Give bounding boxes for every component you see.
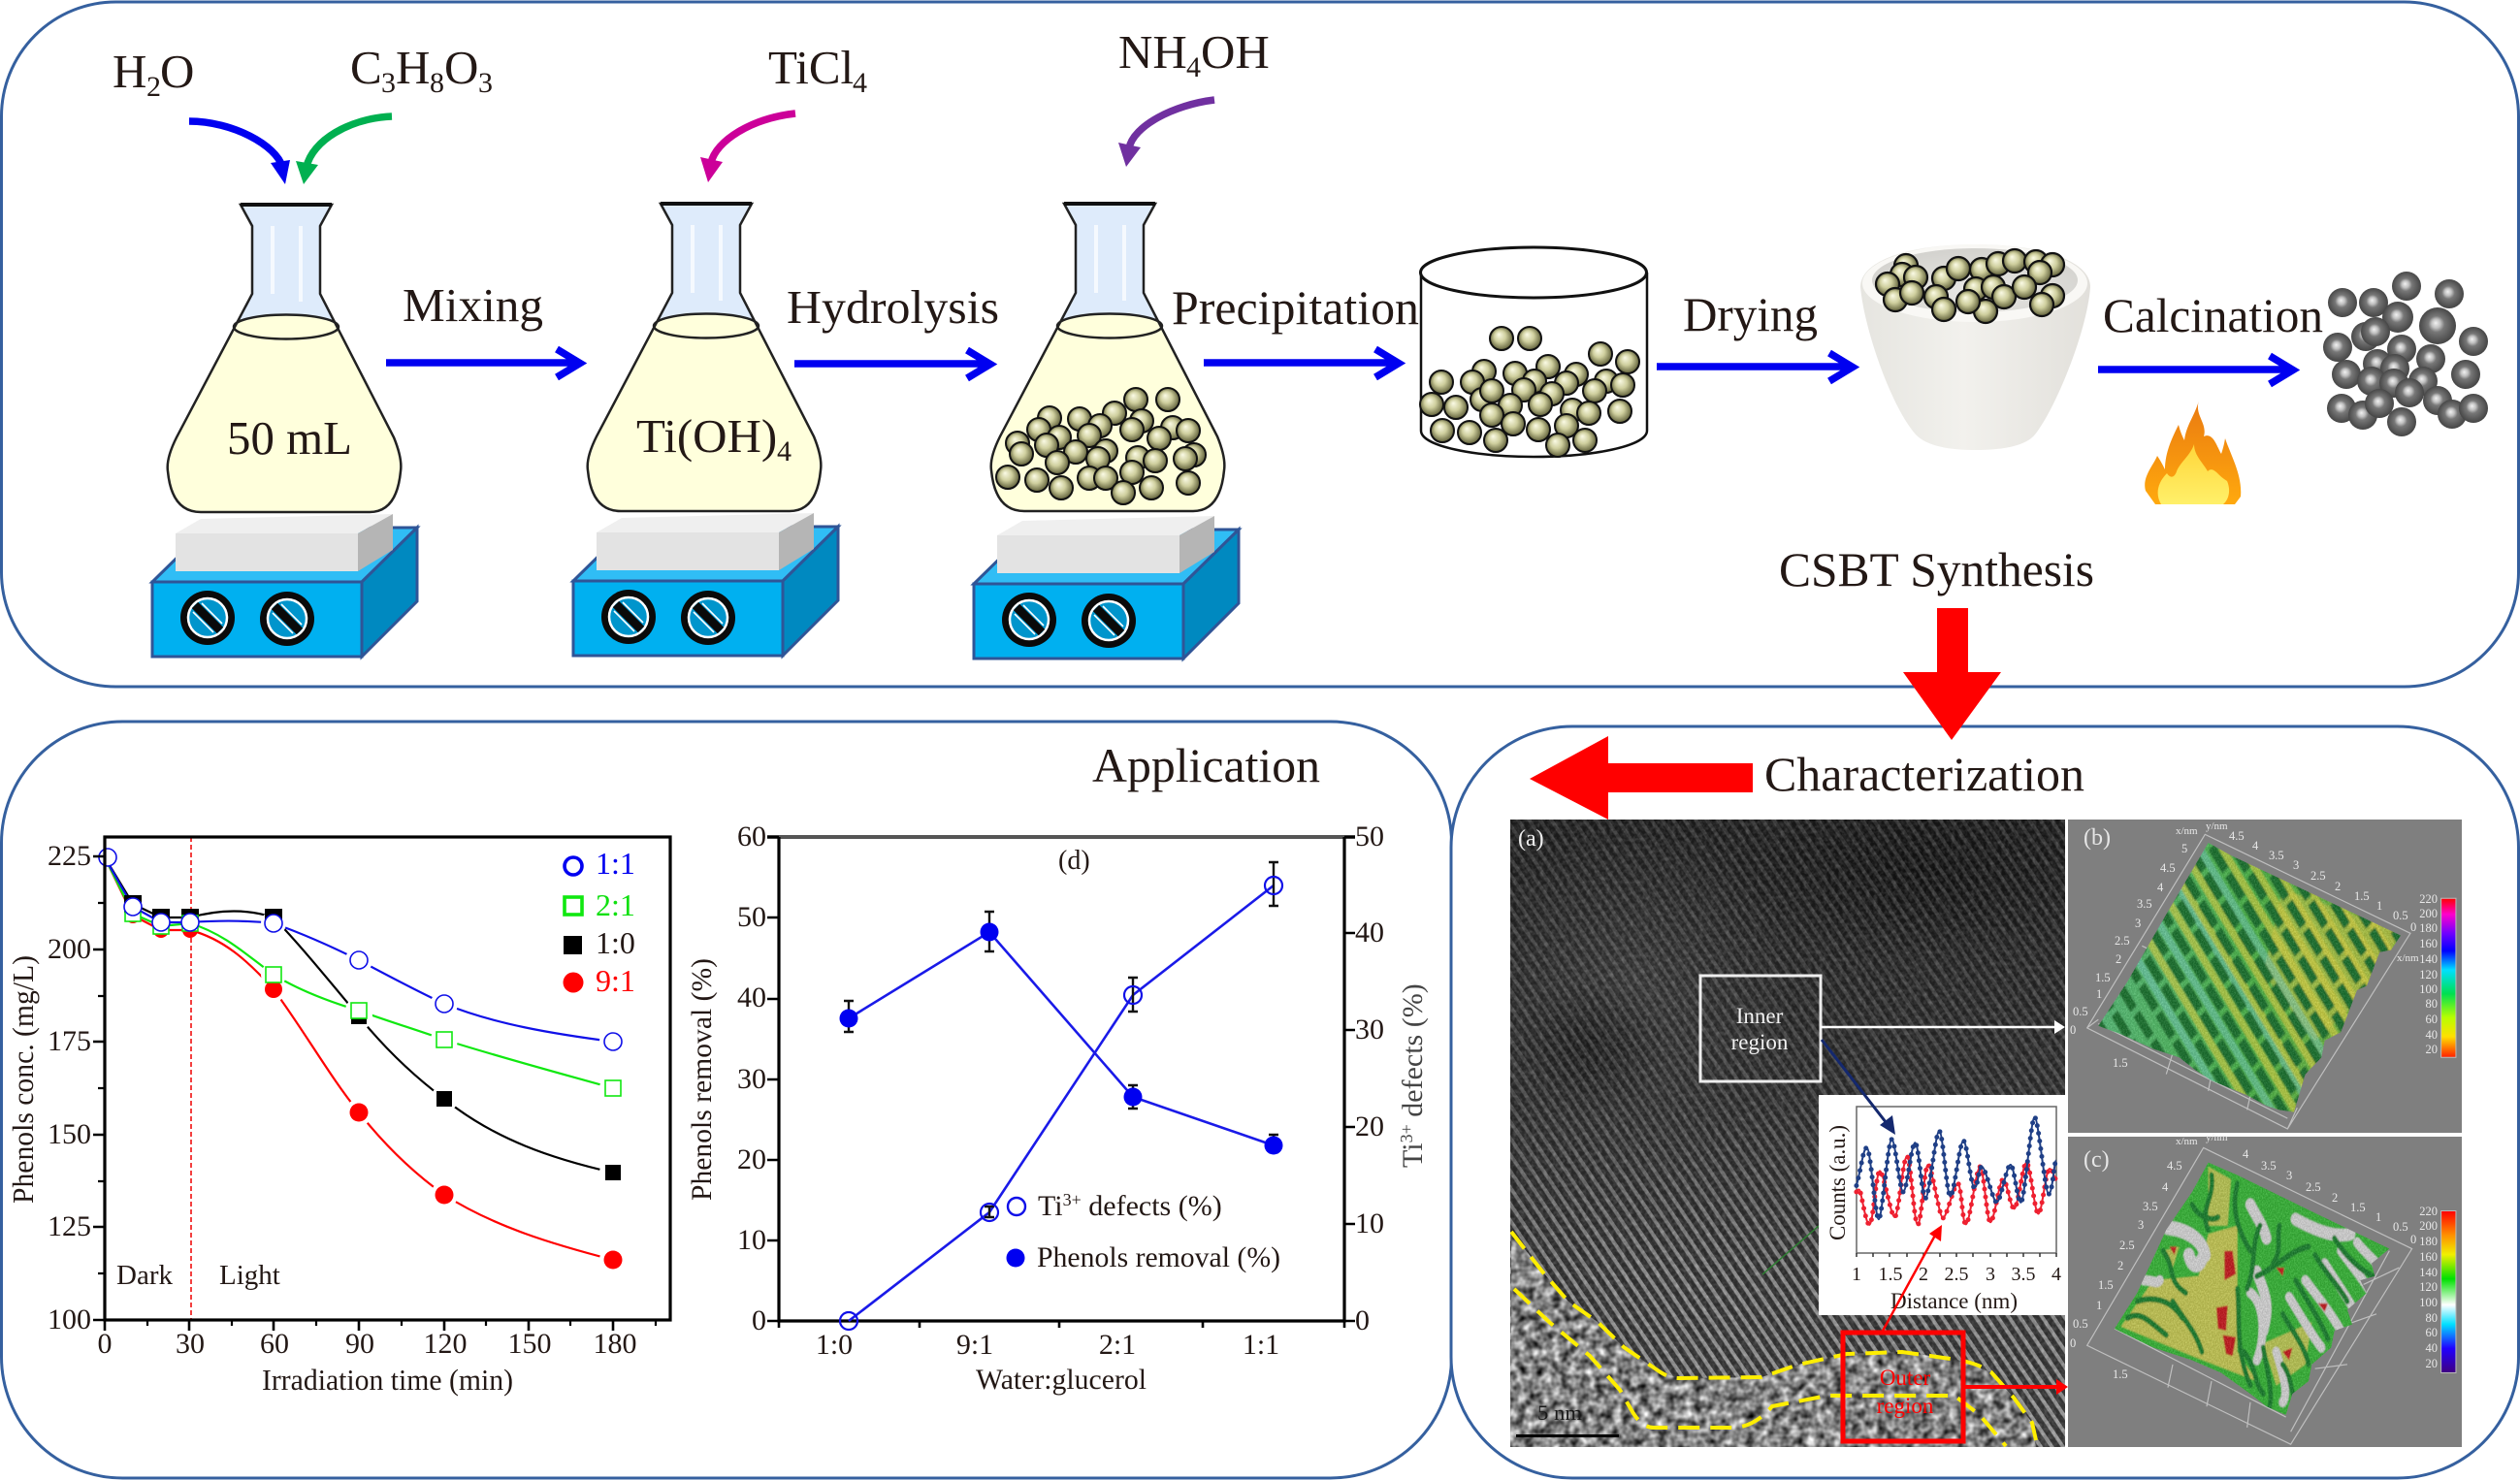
legend: Ti bbox=[1038, 1190, 1063, 1222]
color bar numbers: 60 bbox=[2425, 1326, 2438, 1339]
right axis numbers: 40 bbox=[1355, 917, 1384, 949]
step label: Drying: Drying bbox=[1683, 287, 1818, 341]
hot plate 3 bbox=[974, 516, 1239, 659]
right axis numbers: 0 bbox=[1355, 1304, 1370, 1336]
arrow: glycerol into flask bbox=[296, 116, 392, 184]
axis labels: 2.5 bbox=[2119, 1239, 2135, 1252]
x-axis numbers: 0 bbox=[97, 1328, 113, 1360]
chart: phenols removal and Ti3+ defects vs water:glycerol bbox=[686, 820, 1429, 1396]
series lines bbox=[105, 857, 613, 1260]
flask 1 bbox=[168, 205, 401, 512]
axis labels: 2.5 bbox=[2115, 934, 2130, 948]
right axis numbers bbox=[1355, 820, 1384, 1336]
y-axis title: Phenols conc. (mg/L) bbox=[7, 955, 40, 1204]
outer region box: region bbox=[1877, 1394, 1934, 1418]
step label: Hydrolysis: Hydrolysis bbox=[787, 280, 999, 334]
step label: Mixing: Mixing bbox=[403, 278, 543, 332]
flask 3 with precipitate bbox=[991, 204, 1224, 511]
series 1:1 markers bbox=[99, 849, 622, 1050]
axis labels: 1.5 bbox=[2098, 1278, 2114, 1292]
axis labels bbox=[2070, 1132, 2416, 1381]
color bar bbox=[2441, 898, 2456, 1057]
axis labels: 3.5 bbox=[2137, 897, 2152, 911]
axis labels: 0 bbox=[2410, 1233, 2416, 1246]
axis labels: x/nm bbox=[2176, 825, 2198, 837]
x-axis numbers: 150 bbox=[508, 1328, 551, 1360]
color bar numbers: 120 bbox=[2419, 1280, 2438, 1294]
axis labels: 1.5 bbox=[2113, 1056, 2128, 1070]
flask 2 label: Ti(OH) bbox=[636, 409, 777, 463]
plot frame and ticks bbox=[93, 837, 670, 1331]
wire box bbox=[2087, 1147, 2412, 1444]
label: C3H8O3: H bbox=[396, 41, 430, 94]
x-axis numbers: 180 bbox=[594, 1328, 636, 1360]
beaker with precipitate bbox=[1420, 247, 1647, 457]
axis labels: 0 bbox=[2070, 1336, 2076, 1350]
color bar numbers: 60 bbox=[2425, 1013, 2438, 1026]
legend: 9:1 bbox=[596, 963, 635, 998]
step label: Precipitation: Precipitation bbox=[1172, 280, 1419, 335]
axis labels: 1 bbox=[2096, 987, 2102, 1001]
color bar numbers: 220 bbox=[2419, 1205, 2438, 1218]
axis labels: 3.5 bbox=[2143, 1200, 2158, 1213]
legend: 2:1 bbox=[596, 887, 635, 922]
left axis numbers: 10 bbox=[737, 1224, 766, 1256]
x-axis title: Water:glucerol bbox=[976, 1364, 1147, 1396]
scale bar: 5 nm bbox=[1537, 1400, 1582, 1425]
color bar numbers: 200 bbox=[2419, 907, 2438, 920]
yellow center bbox=[2121, 1226, 2257, 1381]
panel: Characterization bbox=[1451, 726, 2518, 1478]
color bar numbers: 80 bbox=[2425, 997, 2438, 1011]
color bar bbox=[2441, 1211, 2456, 1372]
left axis numbers: 50 bbox=[737, 901, 766, 933]
axis labels: 4 bbox=[2157, 881, 2164, 894]
inset axis numbers bbox=[1852, 1264, 2061, 1285]
red hot spots bbox=[2170, 1246, 2328, 1360]
series: phenols removal bbox=[840, 912, 1282, 1154]
color bar numbers: 80 bbox=[2425, 1311, 2438, 1325]
axis labels: 0.5 bbox=[2393, 1220, 2408, 1234]
white ridges bbox=[2144, 1205, 2376, 1402]
label: C3H8O3: C bbox=[350, 41, 382, 94]
axis labels: 2.5 bbox=[2310, 869, 2326, 883]
arrow: characterization to application bbox=[1530, 736, 1753, 820]
region label: Dark: Dark bbox=[116, 1260, 173, 1291]
y-axis numbers: 225 bbox=[48, 840, 91, 872]
y-axis numbers: 200 bbox=[48, 933, 91, 965]
axis labels: 4.5 bbox=[2160, 861, 2176, 875]
axis labels: 3 bbox=[2293, 858, 2299, 872]
color bar numbers: 100 bbox=[2419, 982, 2438, 996]
category labels: 9:1 bbox=[956, 1329, 993, 1361]
inner region box bbox=[1700, 976, 1821, 1081]
axis labels: 5 bbox=[2181, 842, 2187, 855]
heading: CSBT Synthesis: CSBT Synthesis bbox=[1779, 542, 2094, 596]
scale bar bbox=[1516, 1400, 1619, 1435]
faint measurement line bbox=[1762, 1226, 1819, 1274]
step label: Calcination: Calcination bbox=[2103, 288, 2323, 342]
left axis numbers bbox=[737, 820, 766, 1336]
axis labels: 2 bbox=[2332, 1191, 2338, 1205]
calcined dark particles bbox=[2323, 272, 2488, 436]
arrow: inner region to 3D map bbox=[1821, 1020, 2065, 1034]
icon: flame bbox=[2145, 401, 2241, 504]
color bar numbers: 180 bbox=[2419, 1235, 2438, 1248]
label: NH4OH: OH bbox=[1201, 25, 1270, 79]
label: TiCl4: 4 bbox=[853, 67, 867, 99]
axis labels: 1 bbox=[2096, 1299, 2102, 1312]
inset axis numbers: 3.5 bbox=[2012, 1264, 2035, 1285]
arrow: synthesis to characterization bbox=[1903, 608, 2001, 740]
legend: defects (%) bbox=[1082, 1190, 1222, 1222]
amorphous shell region bbox=[1510, 1222, 2039, 1447]
heading: Characterization: Characterization bbox=[1764, 747, 2084, 801]
axis labels: 1 bbox=[2375, 1210, 2381, 1224]
label: NH4OH: NH bbox=[1118, 25, 1187, 79]
color bar numbers: 40 bbox=[2425, 1028, 2438, 1042]
axis labels: 0.5 bbox=[2393, 909, 2408, 922]
right axis numbers: 50 bbox=[1355, 820, 1384, 853]
axis labels: 2 bbox=[2335, 880, 2341, 893]
color bar numbers bbox=[2419, 1205, 2438, 1370]
x-axis numbers: 30 bbox=[176, 1328, 205, 1360]
3D surface map (c) bbox=[2068, 1132, 2462, 1447]
label: NH4OH: 4 bbox=[1186, 51, 1201, 83]
3D surface map (b) bbox=[1991, 820, 2511, 1133]
axis labels: 3.5 bbox=[2269, 849, 2284, 862]
axis labels: 0 bbox=[2410, 920, 2416, 934]
inset axis numbers: 2.5 bbox=[1944, 1264, 1969, 1285]
right axis numbers: 20 bbox=[1355, 1110, 1384, 1142]
panel letter: (a) bbox=[1518, 826, 1544, 852]
axis labels: 2 bbox=[2117, 1259, 2123, 1272]
HRTEM image (a) bbox=[1510, 820, 2065, 1447]
series: Ti3+ defects bbox=[840, 862, 1282, 1330]
color bar numbers: 20 bbox=[2425, 1357, 2438, 1370]
y-axis numbers: 100 bbox=[48, 1303, 91, 1335]
legend bbox=[1007, 1190, 1280, 1273]
axis labels: 3 bbox=[2286, 1169, 2292, 1182]
axis labels: 3 bbox=[2135, 917, 2141, 930]
inset axis numbers: 2 bbox=[1919, 1264, 1928, 1285]
inner region box: region bbox=[1731, 1030, 1789, 1054]
inner region box: Inner bbox=[1736, 1004, 1784, 1028]
hot plate 2 bbox=[573, 513, 838, 656]
label: H2O: 2 bbox=[146, 71, 161, 103]
color bar numbers: 140 bbox=[2419, 952, 2438, 966]
series 9:1 markers bbox=[125, 908, 623, 1269]
axis labels: 3.5 bbox=[2261, 1159, 2277, 1173]
outer region box: Outer bbox=[1880, 1366, 1931, 1390]
arrow: outer region to red curve bbox=[1882, 1225, 1942, 1333]
label: H2O: H bbox=[113, 45, 146, 98]
arrow: NH4OH into flask bbox=[1118, 100, 1214, 167]
axis labels: 4.5 bbox=[2229, 829, 2245, 843]
legend: 1:0 bbox=[596, 925, 635, 960]
axis labels: x/nm bbox=[2176, 1136, 2198, 1147]
right axis title: defects (%) bbox=[1397, 983, 1429, 1124]
arrow: water into flask bbox=[189, 121, 290, 184]
flask 2 label: 4 bbox=[777, 435, 792, 467]
panel: CSBT synthesis bbox=[2, 2, 2518, 687]
arrow: TiCl4 into flask bbox=[700, 113, 795, 182]
label: C3H8O3: O bbox=[444, 41, 478, 94]
axis labels: 2 bbox=[2116, 952, 2121, 966]
arrow: inner region to blue curve bbox=[1822, 1040, 1895, 1135]
left axis numbers: 40 bbox=[737, 981, 766, 1013]
inset: intensity line profile bbox=[1819, 1095, 2065, 1315]
left axis numbers: 20 bbox=[737, 1143, 766, 1175]
y-axis numbers: 125 bbox=[48, 1210, 91, 1242]
color bar numbers bbox=[2419, 892, 2438, 1056]
series 2:1 markers bbox=[125, 906, 621, 1096]
y-axis numbers: 150 bbox=[48, 1118, 91, 1150]
axis labels: 1.5 bbox=[2350, 1201, 2366, 1214]
inset axis numbers: 1 bbox=[1852, 1264, 1861, 1285]
left axis numbers: 30 bbox=[737, 1063, 766, 1095]
color bar numbers: 180 bbox=[2419, 921, 2438, 935]
arrow: outer region to 3D map bbox=[1963, 1379, 2068, 1395]
region label: Light: Light bbox=[219, 1260, 280, 1291]
hot plate 1 bbox=[152, 514, 417, 657]
left axis numbers: 60 bbox=[737, 820, 766, 853]
axis labels: 2.5 bbox=[2306, 1180, 2321, 1194]
right axis title: 3+ bbox=[1397, 1124, 1416, 1142]
wire box bbox=[2087, 834, 2410, 1129]
y-axis numbers bbox=[48, 840, 91, 1335]
panel letter: (b) bbox=[2084, 825, 2111, 851]
category labels: 1:0 bbox=[816, 1329, 853, 1361]
step arrow: Hydrolysis bbox=[794, 350, 990, 378]
right axis numbers: 10 bbox=[1355, 1207, 1384, 1239]
label: TiCl4: TiCl bbox=[768, 41, 854, 94]
right axis title: Ti bbox=[1397, 1142, 1429, 1168]
axis labels: 1.5 bbox=[2354, 889, 2370, 903]
axis labels bbox=[2070, 820, 2419, 1070]
legend: Phenols removal (%) bbox=[1037, 1241, 1280, 1273]
category labels: 2:1 bbox=[1099, 1329, 1136, 1361]
step arrow: Calcination bbox=[2098, 356, 2293, 384]
legend: 3+ bbox=[1063, 1190, 1082, 1209]
inset axis numbers: 1.5 bbox=[1878, 1264, 1903, 1285]
yellow dashed shell boundaries bbox=[1511, 1232, 2036, 1446]
outer region box bbox=[1843, 1333, 1963, 1441]
axis labels: 4 bbox=[2162, 1180, 2169, 1194]
color bar numbers: 120 bbox=[2419, 968, 2438, 981]
axis labels: y/nm bbox=[2206, 820, 2228, 832]
x-axis numbers: 90 bbox=[345, 1328, 374, 1360]
x-axis numbers: 60 bbox=[260, 1328, 289, 1360]
label: C3H8O3: 3 bbox=[478, 67, 493, 99]
color bar numbers: 20 bbox=[2425, 1043, 2438, 1056]
marker halos bbox=[261, 911, 627, 1273]
dark green channels bbox=[2127, 1175, 2374, 1406]
legend bbox=[563, 846, 635, 998]
inset x title: Distance (nm) bbox=[1890, 1289, 2018, 1313]
label: C3H8O3: 8 bbox=[430, 67, 444, 99]
axis labels: x/nm bbox=[2397, 952, 2419, 964]
step arrow: Precipitation bbox=[1204, 349, 1399, 377]
flask 1 volume label: 50 mL bbox=[227, 411, 352, 465]
color bar numbers: 160 bbox=[2419, 937, 2438, 950]
color bar numbers: 100 bbox=[2419, 1296, 2438, 1309]
axis labels: 0 bbox=[2070, 1023, 2076, 1037]
heading: Application: Application bbox=[1092, 738, 1320, 792]
axis labels: 0.5 bbox=[2073, 1005, 2088, 1018]
panel: Application bbox=[2, 722, 1451, 1478]
left axis numbers: 0 bbox=[752, 1304, 766, 1336]
x-axis title: Irradiation time (min) bbox=[262, 1364, 513, 1397]
panel letter: (d) bbox=[1058, 846, 1090, 876]
axis labels: 4 bbox=[2243, 1147, 2249, 1161]
color bar numbers: 160 bbox=[2419, 1250, 2438, 1264]
category labels bbox=[816, 1329, 1279, 1361]
inset y title: Counts (a.u.) bbox=[1825, 1125, 1850, 1240]
label: C3H8O3: 3 bbox=[381, 67, 396, 99]
axis labels: 4 bbox=[2252, 839, 2259, 853]
color bar numbers: 220 bbox=[2419, 892, 2438, 906]
profile curves bbox=[1857, 1117, 2056, 1225]
label: H2O: O bbox=[160, 45, 194, 98]
axis labels: 3 bbox=[2138, 1218, 2144, 1232]
step arrow: Drying bbox=[1657, 353, 1853, 381]
y-axis numbers: 175 bbox=[48, 1025, 91, 1057]
axis labels: y/nm bbox=[2206, 1132, 2228, 1143]
crucible with dried particles bbox=[1860, 244, 2090, 450]
x-axis numbers: 120 bbox=[423, 1328, 468, 1360]
inset axis numbers: 4 bbox=[2052, 1264, 2061, 1285]
inset axis numbers: 3 bbox=[1986, 1264, 1995, 1285]
right axis numbers: 30 bbox=[1355, 1013, 1384, 1046]
color bar numbers: 200 bbox=[2419, 1219, 2438, 1233]
x-axis numbers bbox=[97, 1328, 636, 1360]
series 1:0 markers bbox=[124, 895, 621, 1180]
axis labels: 4.5 bbox=[2167, 1159, 2182, 1173]
legend: 1:1 bbox=[596, 846, 635, 881]
chart: phenols concentration vs irradiation time bbox=[7, 837, 670, 1397]
color bar numbers: 140 bbox=[2419, 1266, 2438, 1279]
axis labels: 1.5 bbox=[2113, 1367, 2128, 1381]
step arrow: Mixing bbox=[386, 349, 580, 377]
category labels: 1:1 bbox=[1243, 1329, 1279, 1361]
color bar numbers: 40 bbox=[2425, 1341, 2438, 1355]
axis labels: 1.5 bbox=[2095, 971, 2111, 984]
axis labels: 0.5 bbox=[2073, 1317, 2088, 1331]
axes and ticks bbox=[767, 837, 1355, 1328]
panel letter: (c) bbox=[2084, 1147, 2110, 1173]
axis labels: 1 bbox=[2376, 899, 2382, 913]
flask 2 bbox=[588, 204, 821, 511]
left axis title: Phenols removal (%) bbox=[686, 958, 718, 1201]
